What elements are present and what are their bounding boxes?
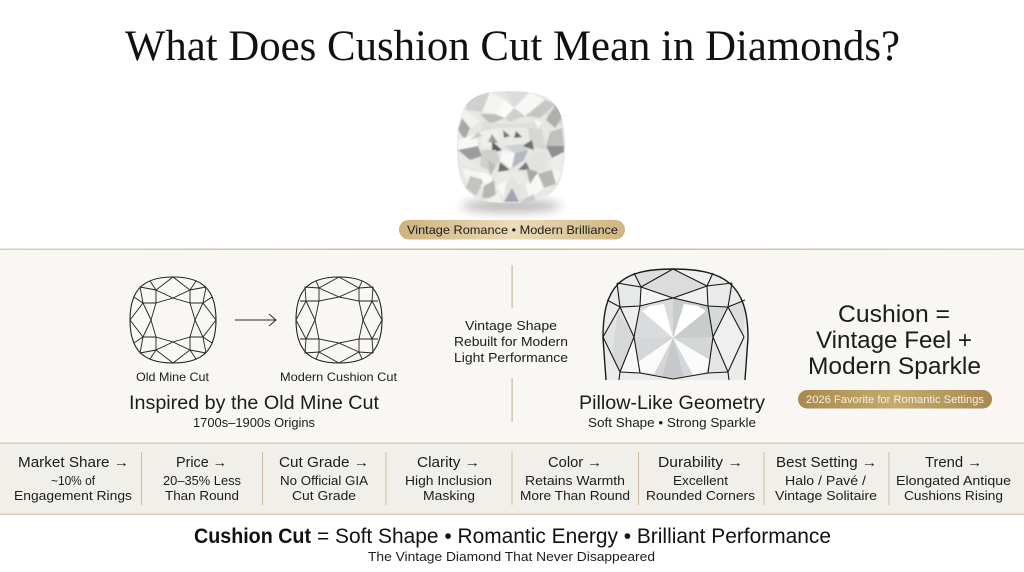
callout: cushion equation <box>808 301 981 380</box>
label: modern cushion cut: Modern Cushion Cut <box>280 370 398 384</box>
stat: trend: Cushions Rising <box>904 489 1003 503</box>
icon: pillow-like geometry diamond <box>600 265 750 383</box>
pill: 2026 favorite: 2026 Favorite for Romantic Settings <box>806 394 984 406</box>
stat: cut grade <box>279 455 369 503</box>
subheading: soft shape strong sparkle: Soft Shape • Strong Sparkle <box>588 416 756 430</box>
stat: trend <box>896 455 1011 503</box>
stat: best setting <box>775 455 877 503</box>
stat: market share: Market Share → <box>18 455 129 471</box>
heading: pillow-like geometry: Pillow-Like Geometry <box>579 392 765 414</box>
stat: color: Retains Warmth <box>525 474 625 488</box>
stat: clarity: Clarity → <box>417 455 480 471</box>
stat: cut grade: Cut Grade → <box>279 455 369 471</box>
stat: durability: Excellent <box>673 474 729 488</box>
stat: best setting: Halo / Pavé / <box>785 474 867 488</box>
panel: stats band <box>0 442 1024 515</box>
text: vintage shape rebuilt <box>454 319 568 365</box>
stat: market share <box>14 455 132 503</box>
subheading: origins: 1700s–1900s Origins <box>193 416 315 430</box>
stat: trend: Trend → <box>925 455 982 471</box>
stat: cut grade: No Official GIA <box>280 474 369 488</box>
heading: inspired by the old mine cut: Inspired by the Old Mine Cut <box>129 392 380 414</box>
arrow: old mine to modern <box>235 314 276 326</box>
text: vintage shape rebuilt: Light Performance <box>454 351 568 365</box>
tagline: the vintage diamond: The Vintage Diamond That Never Disappeared <box>368 549 655 564</box>
callout: cushion equation: Cushion = <box>838 301 950 328</box>
text: vintage shape rebuilt: Vintage Shape <box>465 319 557 333</box>
stat: durability: Durability → <box>658 455 743 471</box>
pill: tagline <box>399 220 625 240</box>
stat: price <box>163 455 241 503</box>
pill: tagline: Vintage Romance • Modern Brilliance <box>407 223 618 237</box>
stat: market share: ~10% of <box>51 474 95 488</box>
stat: market share: Engagement Rings <box>14 489 132 503</box>
text: vintage shape rebuilt: Rebuilt for Modern <box>454 335 568 349</box>
stat: cut grade: Cut Grade <box>292 489 356 503</box>
summary line: = Soft Shape • Romantic Energy • Brilliant Performance <box>317 525 831 548</box>
callout: cushion equation: Vintage Feel + <box>816 327 972 354</box>
stat: durability <box>646 455 755 503</box>
stat: color: More Than Round <box>520 489 630 503</box>
label: old mine cut: Old Mine Cut <box>136 370 210 384</box>
stat: best setting: Best Setting → <box>776 455 877 471</box>
stat: best setting: Vintage Solitaire <box>775 489 877 503</box>
stat: color: Color → <box>548 455 602 471</box>
diamond photo <box>455 89 570 212</box>
stat: price: Than Round <box>165 489 239 503</box>
stat: color <box>520 455 630 503</box>
icon: old mine cut diagram <box>130 277 216 363</box>
stat: clarity: Masking <box>423 489 475 503</box>
pill: 2026 favorite <box>798 390 992 408</box>
title: What Does Cushion Cut Mean in Diamonds? <box>125 23 900 70</box>
stat: durability: Rounded Corners <box>646 489 755 503</box>
stat: trend: Elongated Antique <box>896 474 1011 488</box>
panel: evolution and geometry <box>0 248 1024 443</box>
stat: price: 20–35% Less <box>163 474 241 488</box>
icon: modern cushion cut diagram <box>296 277 382 363</box>
stat: clarity: High Inclusion <box>405 474 492 488</box>
stat: clarity <box>405 455 492 503</box>
summary line: Cushion Cut <box>194 525 311 548</box>
stat: price: Price → <box>176 455 227 471</box>
callout: cushion equation: Modern Sparkle <box>808 353 981 380</box>
